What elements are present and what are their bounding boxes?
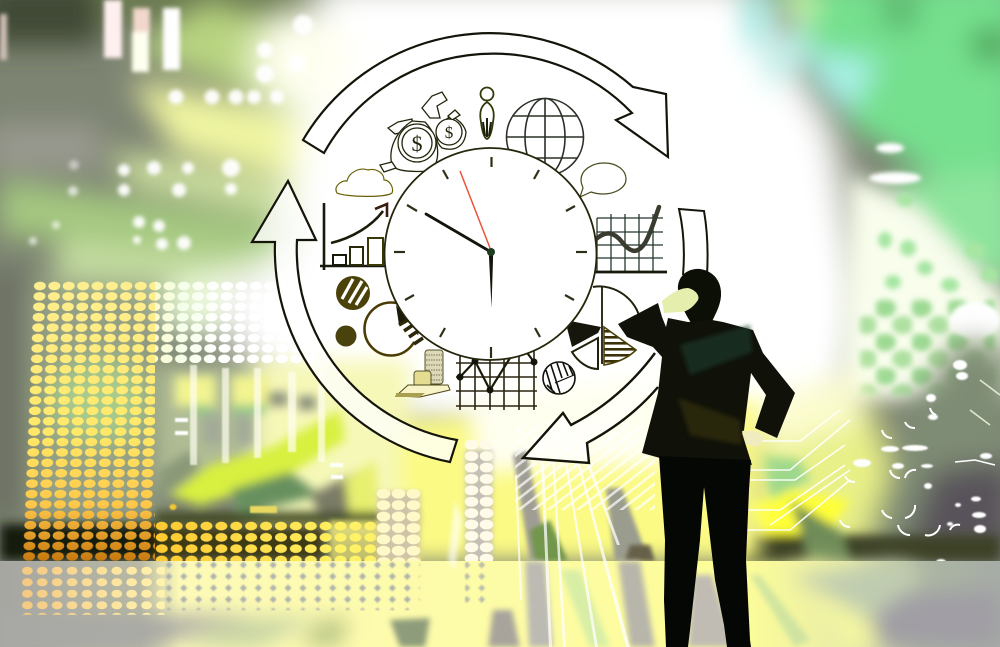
chart: rising bars bbox=[320, 203, 387, 270]
bokeh lights bbox=[29, 15, 313, 250]
icon: speech bubble bbox=[580, 163, 626, 197]
icon: cloud bbox=[336, 169, 393, 196]
dot matrix: bottom rows bbox=[18, 520, 424, 561]
icon: money bags: $ bbox=[412, 131, 422, 156]
chart: pie lower left bbox=[364, 302, 425, 356]
white streak rays bbox=[448, 420, 630, 647]
right mid dots bbox=[840, 143, 1000, 400]
dot matrix: yellow block bbox=[15, 278, 315, 522]
right lower wall bbox=[750, 340, 1000, 560]
circuit rings and glints bbox=[840, 408, 995, 535]
faded white bars bbox=[170, 365, 343, 513]
man: lower hand bbox=[742, 431, 765, 447]
chart: line grid right bbox=[595, 207, 667, 272]
icon: person bbox=[480, 88, 494, 139]
icon: hatched circle bbox=[543, 362, 575, 394]
arrow: left arc bbox=[252, 181, 457, 462]
man: trousers bbox=[659, 456, 751, 647]
man: head bbox=[678, 269, 721, 324]
icon: dark dot bbox=[336, 326, 356, 346]
lower middle panels bbox=[155, 360, 760, 560]
man: raised hand bbox=[662, 288, 699, 313]
light rays bottom centre bbox=[513, 425, 655, 561]
chart: large pie right bbox=[565, 286, 640, 369]
top-right green bbox=[745, 0, 1000, 290]
central white glow bbox=[210, 0, 865, 460]
clock bbox=[384, 148, 596, 360]
man: jacket and arms bbox=[618, 303, 795, 465]
icon: money bags bbox=[380, 92, 466, 172]
icon: money bags: $ bbox=[445, 123, 453, 142]
circuit pattern right bbox=[745, 380, 1000, 530]
floor bbox=[0, 561, 1000, 647]
clock ticks bbox=[394, 157, 587, 358]
dotted columns under the diagram bbox=[376, 439, 494, 561]
chart: grid with zigzag bbox=[456, 350, 538, 410]
arrow: bottom right arc bbox=[523, 353, 658, 463]
dark floor-line band bbox=[0, 524, 325, 561]
top-left white light bars bbox=[0, 0, 180, 72]
floor dot reflection bbox=[20, 562, 493, 615]
icon: coin stacks bbox=[396, 350, 450, 397]
left wall tones bbox=[0, 0, 345, 520]
arrow: right arc segment bbox=[679, 209, 708, 275]
arrow: top arc bbox=[303, 33, 668, 157]
icon: striped circle bbox=[336, 276, 370, 310]
clock hands bbox=[426, 214, 491, 252]
man: silhouette bbox=[618, 269, 795, 647]
icon: globe bbox=[506, 98, 584, 176]
